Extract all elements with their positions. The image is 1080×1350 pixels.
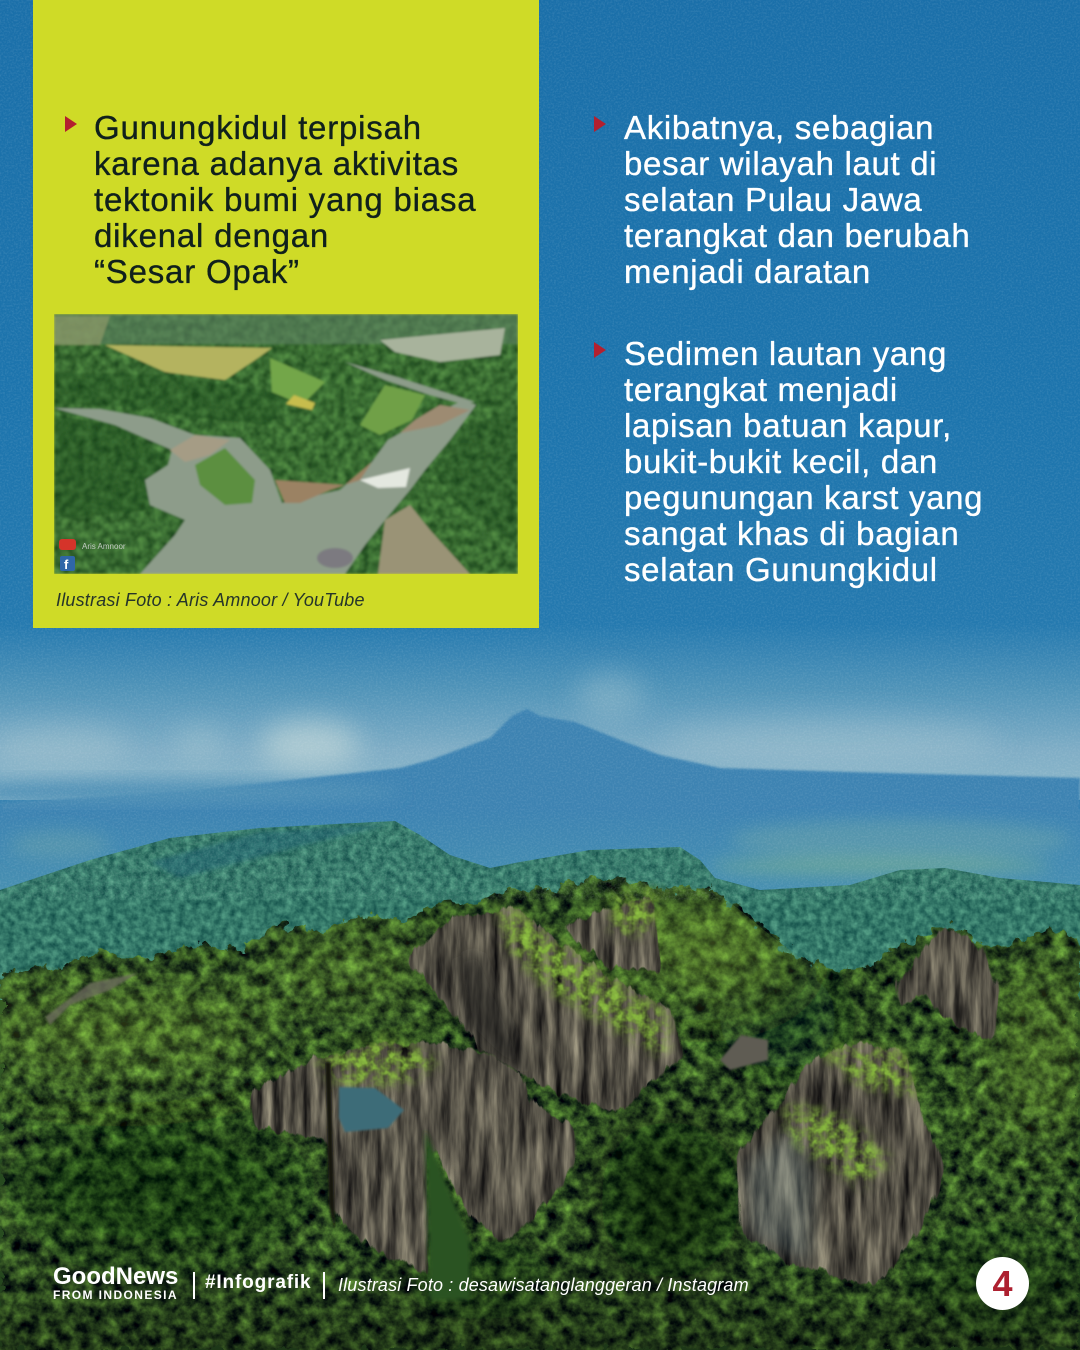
text: sea lifted: Akibatnya, sebagian bbox=[624, 109, 934, 146]
clouds bbox=[0, 673, 1000, 769]
text: sea lifted bbox=[624, 109, 970, 290]
photo: river aerial: f bbox=[64, 557, 69, 572]
text: sediment: Sedimen lautan yang bbox=[624, 335, 947, 372]
foreground forest bbox=[0, 877, 1080, 1350]
facebook badge bbox=[60, 556, 75, 571]
far hills bbox=[0, 821, 1080, 1040]
rock: small centre bbox=[720, 1035, 768, 1070]
text: sea lifted: besar wilayah laut di bbox=[624, 145, 937, 182]
text: sediment: pegunungan karst yang bbox=[624, 479, 983, 516]
valley haze bbox=[0, 810, 1080, 990]
page number badge: 4 bbox=[992, 1263, 1013, 1304]
hill shade bbox=[150, 824, 390, 878]
horizon haze bbox=[0, 780, 400, 804]
panel: lime text card bbox=[33, 0, 539, 628]
text: sea lifted: menjadi daratan bbox=[624, 253, 871, 290]
text: Sesar Opak explanation: karena adanya aktivitas bbox=[94, 145, 459, 182]
logo: GoodNews from Indonesia bbox=[53, 1260, 1021, 1304]
photo credit: Ilustrasi Foto : desawisatanglanggeran / Instagram bbox=[338, 1275, 749, 1295]
photo: river aerial bbox=[54, 314, 518, 574]
hashtag: #Infografik bbox=[205, 1272, 311, 1293]
rock: right front bbox=[736, 1043, 945, 1287]
karst rocks bbox=[45, 888, 998, 1300]
page number badge bbox=[976, 1257, 1029, 1310]
text: sediment: lapisan batuan kapur, bbox=[624, 407, 952, 444]
text: Sesar Opak explanation: tektonik bumi yang biasa bbox=[94, 181, 476, 218]
sky bbox=[0, 0, 1080, 800]
text: Sesar Opak explanation bbox=[94, 109, 476, 290]
text: sediment: terangkat menjadi bbox=[624, 371, 898, 408]
rock: central bbox=[404, 888, 682, 1113]
bullet arrow bbox=[594, 116, 606, 132]
rock: right peak bbox=[896, 925, 998, 1043]
text: Sesar Opak explanation: Gunungkidul terpisah bbox=[94, 109, 422, 146]
distant volcano bbox=[0, 709, 1080, 860]
text: sediment: sangat khas di bagian bbox=[624, 515, 959, 552]
rock: left front bbox=[248, 1035, 578, 1300]
text: sea lifted: terangkat dan berubah bbox=[624, 217, 970, 254]
text: Sesar Opak explanation: dikenal dengan bbox=[94, 217, 329, 254]
film grain bbox=[0, 0, 1080, 900]
logo: GoodNews from Indonesia: FROM INDONESIA bbox=[53, 1288, 178, 1302]
logo: GoodNews from Indonesia: GoodNews bbox=[53, 1263, 178, 1290]
bullet arrow bbox=[594, 342, 606, 358]
photo caption: Ilustrasi Foto : Aris Amnoor / YouTube bbox=[56, 590, 365, 610]
text: sediment: bukit-bukit kecil, dan bbox=[624, 443, 938, 480]
photo: river aerial: Aris Amnoor bbox=[82, 542, 126, 551]
valley fields bbox=[10, 820, 1070, 876]
youtube badge bbox=[59, 539, 76, 550]
text: sediment: selatan Gunungkidul bbox=[624, 551, 938, 588]
rock: small left bbox=[45, 973, 138, 1025]
footer bbox=[53, 1257, 1029, 1310]
bullet arrow bbox=[65, 116, 77, 132]
text: Sesar Opak explanation: “Sesar Opak” bbox=[94, 253, 300, 290]
text: sediment bbox=[624, 335, 983, 588]
text: sea lifted: selatan Pulau Jawa bbox=[624, 181, 922, 218]
